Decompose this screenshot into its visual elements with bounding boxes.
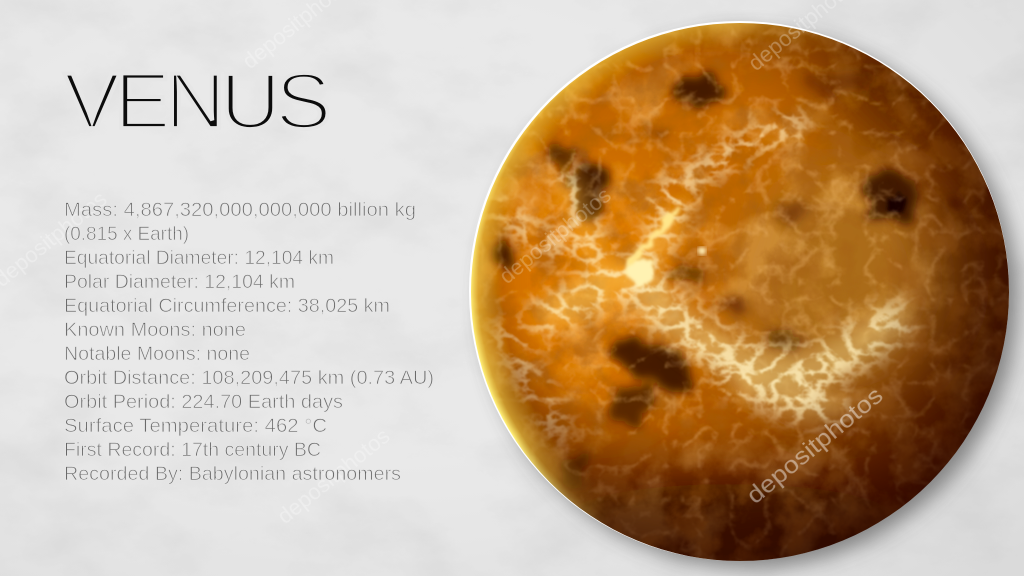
surface veins — [476, 27, 1008, 560]
planet facts text block: Recorded By: Babylonian astronomers — [64, 463, 401, 485]
planet facts text block: Known Moons: none — [64, 319, 246, 341]
planet facts text block: First Record: 17th century BC — [64, 439, 321, 461]
planet facts text block: Mass: 4,867,320,000,000,000 billion kg — [64, 199, 416, 221]
glow under bright flows — [550, 180, 895, 410]
planet facts text block: Equatorial Circumference: 38,025 km — [64, 295, 390, 317]
planet facts text block: (0.815 x Earth) — [64, 223, 189, 245]
small bright dot — [698, 247, 706, 255]
large tonal regions — [500, 50, 1015, 576]
warm blotches — [476, 23, 1006, 557]
yellow limb glow — [471, 23, 835, 525]
filamentary bright flows — [480, 98, 929, 455]
terminator shading — [460, 10, 1024, 576]
planet facts text block: Notable Moons: none — [64, 343, 250, 365]
bright impact core — [626, 258, 654, 286]
planet facts text block: Orbit Period: 224.70 Earth days — [64, 391, 343, 413]
planet facts text block: Polar Diameter: 12,104 km — [64, 271, 295, 293]
title: VENUS — [64, 56, 328, 145]
surface mottling — [486, 34, 1008, 561]
crater centre — [885, 196, 907, 214]
background watermarks: depositphotos — [272, 423, 395, 529]
planet facts text block: Equatorial Diameter: 12,104 km — [64, 247, 334, 269]
planet watermark: depositphotos — [742, 382, 888, 510]
planet Venus — [460, 0, 1024, 576]
planet facts text block — [64, 199, 434, 485]
upper bright streak — [630, 208, 680, 262]
left planet watermark: depositphotos — [494, 182, 616, 289]
background watermarks — [0, 0, 395, 529]
planet facts text block: Surface Temperature: 462 °C — [64, 415, 327, 437]
planet facts text block: Orbit Distance: 108,209,475 km (0.73 AU) — [64, 367, 434, 389]
planet drop shadow — [482, 32, 1018, 568]
dark craters — [495, 70, 958, 488]
